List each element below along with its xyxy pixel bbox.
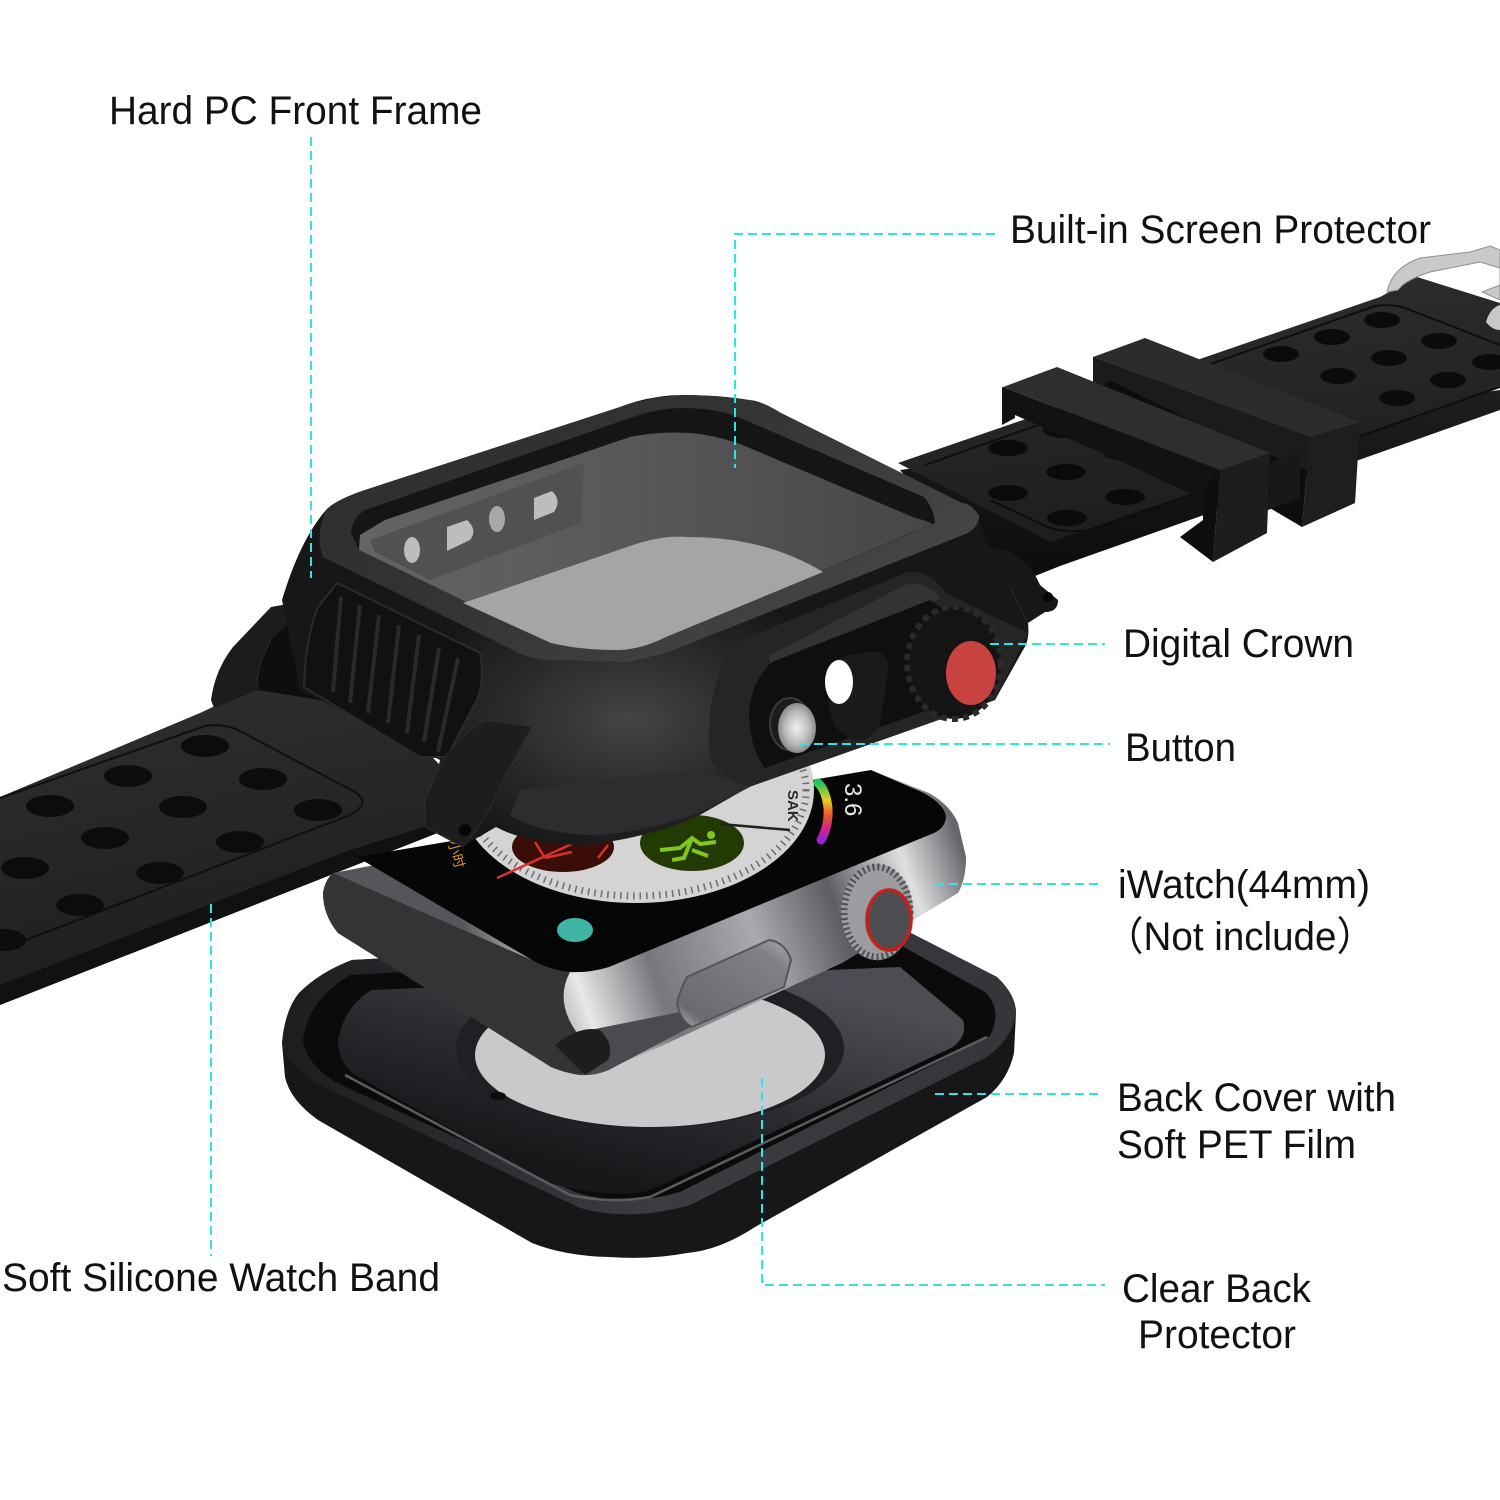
screen text: SAK: SAK — [784, 790, 801, 822]
lug screw — [1043, 592, 1053, 602]
red complication — [512, 822, 614, 872]
plate upper raised band — [770, 584, 940, 675]
band: left strap — [0, 680, 470, 1005]
green complication — [640, 815, 744, 871]
keeper loops — [1002, 338, 1360, 562]
cover bright edge — [345, 1037, 987, 1200]
rear keeper top band — [1093, 338, 1360, 437]
plate recess — [749, 600, 990, 768]
label line two: Protector — [1138, 1313, 1296, 1357]
buckle — [1387, 246, 1500, 330]
strap holes — [0, 735, 342, 951]
inner frame seal — [351, 408, 935, 650]
callout: clear back protector — [762, 1078, 1312, 1357]
watch face reflection — [463, 537, 823, 650]
crown red ring — [867, 890, 911, 950]
buckle metal frame — [1387, 246, 1500, 300]
label text: Soft Silicone Watch Band — [2, 1256, 440, 1300]
strap holes — [988, 312, 1500, 526]
strap panel groove — [0, 725, 362, 950]
label line two: （Not include） — [1105, 915, 1375, 959]
watch lower corner — [555, 1029, 610, 1075]
label line one: iWatch(44mm) — [1118, 863, 1370, 907]
screen protector glass — [359, 433, 932, 650]
side button — [677, 940, 791, 1027]
buckle pin — [1486, 305, 1500, 330]
cutout 1 — [404, 537, 420, 563]
app icon flower — [557, 918, 593, 942]
protective front case — [211, 395, 1058, 847]
label text: Hard PC Front Frame — [109, 89, 482, 133]
watch dark lower section — [580, 1010, 700, 1075]
side button metal — [770, 698, 810, 750]
callout: built-in screen protector — [735, 208, 1431, 468]
grill ribs — [333, 597, 458, 752]
vent grill panel — [304, 583, 482, 757]
strap body — [0, 680, 470, 1005]
callout: back cover — [935, 1076, 1396, 1167]
runner icon — [660, 838, 716, 860]
cutout 2 — [447, 520, 473, 551]
front keeper top band — [1003, 367, 1270, 470]
charging ring — [456, 968, 844, 1128]
watch screen — [357, 770, 946, 972]
back cover — [282, 930, 1016, 1258]
microphone hole — [825, 660, 853, 704]
rim top surface — [320, 395, 979, 662]
front keeper wall — [1213, 453, 1270, 562]
watch case steel — [323, 770, 966, 1075]
clear back film — [475, 983, 825, 1127]
front keeper left post — [1002, 387, 1015, 425]
rear keeper wall — [1302, 422, 1360, 527]
label line one: Back Cover with — [1117, 1076, 1396, 1120]
sensor cutouts — [404, 491, 558, 563]
rear keeper inner shadow — [1093, 357, 1310, 527]
cover inner well — [338, 967, 964, 1194]
cutout 3 — [489, 506, 505, 532]
red crown cap — [946, 641, 996, 705]
strap inner panel groove — [925, 305, 1500, 531]
screen text: 3.6: 3.6 — [839, 783, 866, 816]
cover seal channel — [303, 945, 995, 1200]
band: right strap — [898, 277, 1500, 590]
red complication icon — [497, 838, 608, 878]
microphone slot — [827, 652, 888, 741]
label line one: Clear Back — [1122, 1267, 1312, 1311]
front lug — [425, 720, 532, 847]
watch face dial — [458, 677, 814, 903]
label text: Built-in Screen Protector — [1010, 208, 1431, 252]
apple watch — [323, 677, 966, 1075]
rear keeper front band — [1093, 357, 1310, 472]
cutout 4 — [534, 491, 558, 520]
digital crown — [841, 864, 913, 960]
case body silhouette — [282, 395, 1028, 846]
side plate — [709, 572, 1028, 787]
strap top surface — [898, 277, 1500, 542]
right rear lug — [990, 547, 1058, 623]
front keeper — [1002, 367, 1270, 562]
side button cap — [778, 703, 816, 753]
crown knob — [907, 607, 1001, 719]
label text: Digital Crown — [1123, 622, 1354, 666]
lower body highlight — [510, 770, 750, 835]
cover outer shell — [282, 930, 1016, 1258]
left lug — [211, 600, 330, 708]
label text: Button — [1125, 726, 1236, 770]
front keeper front band — [1003, 387, 1220, 505]
callout: iwatch — [935, 863, 1375, 959]
screen text: orange chinese: 小时 — [445, 839, 468, 870]
label line two: Soft PET Film — [1117, 1123, 1356, 1167]
front keeper inside wall — [1180, 470, 1220, 562]
lug screw — [459, 824, 471, 836]
sensor panel — [370, 463, 584, 580]
activity arc — [818, 783, 828, 840]
runner head — [707, 831, 715, 839]
lug inner shadow — [258, 607, 320, 700]
dial hand — [720, 824, 790, 830]
cover top rim — [282, 930, 1016, 1214]
rear keeper — [1093, 338, 1360, 527]
film small dot — [490, 1092, 506, 1100]
strap side thickness — [900, 390, 1500, 590]
watch dark left side — [323, 873, 595, 1075]
band between keepers — [1250, 452, 1300, 510]
strap lower side — [0, 825, 440, 1005]
